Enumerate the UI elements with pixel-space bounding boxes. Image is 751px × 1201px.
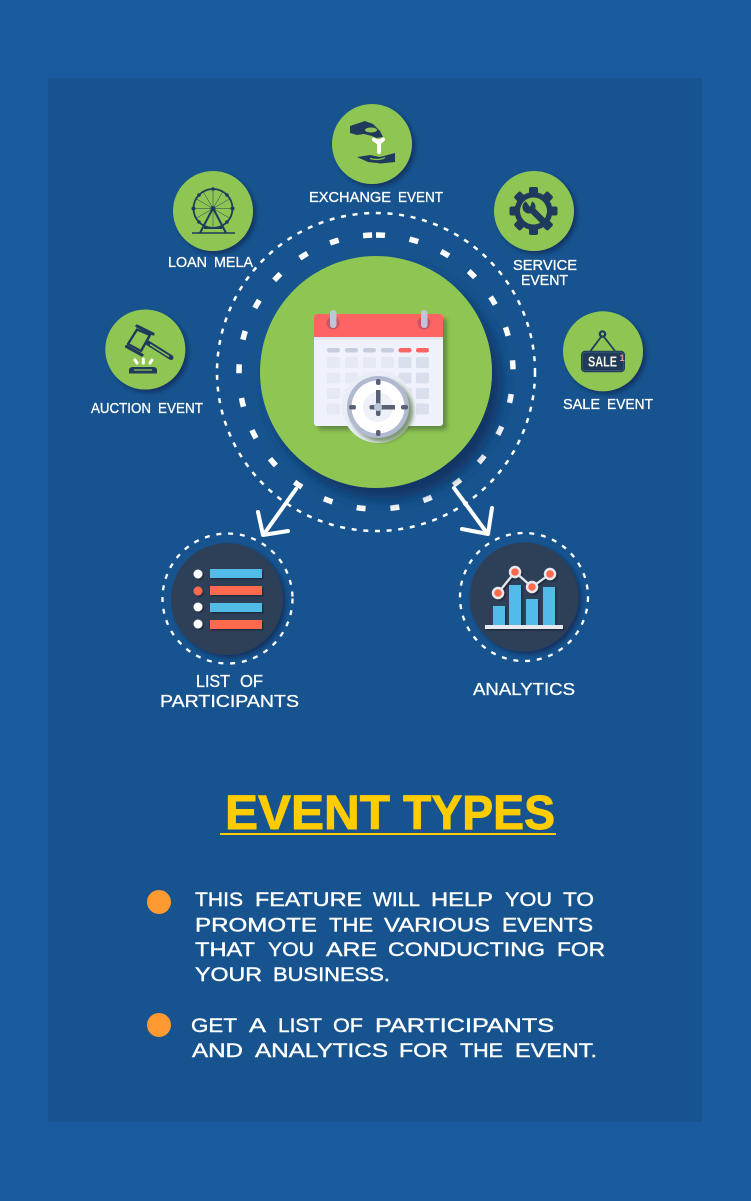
panel: main background (48, 78, 702, 1122)
label: exchange event: EVENT (398, 189, 443, 206)
bullet point 1: YOU (505, 889, 552, 911)
bullet point 2: AND (192, 1040, 243, 1062)
bullet point 1: EVENTS (502, 914, 593, 936)
bullet point 1: FEATURE (255, 889, 362, 911)
bullet point 2: ANALYTICS (255, 1040, 388, 1062)
label: auction event (91, 400, 203, 417)
icon: exchange hands (350, 121, 395, 164)
bullet point 1: YOUR (195, 964, 262, 986)
bullet point 1: WILL (373, 889, 420, 911)
dotted outer ring (217, 213, 535, 531)
label: exchange event: EXCHANGE (309, 189, 391, 206)
bullet point 1: THIS (195, 889, 243, 911)
bullet point 1: HELP (431, 889, 493, 911)
label: sale event (563, 396, 653, 413)
arrow: to analytics (454, 488, 492, 534)
icon: sale sign: SALE (588, 355, 617, 371)
bullet point 1: VARIOUS (384, 914, 490, 936)
bullet point 1: THE (329, 914, 373, 936)
label: service event: EVENT (521, 272, 568, 289)
icon: calendar with clock (314, 310, 443, 443)
bullet point 2: LIST (278, 1015, 322, 1037)
label: auction event: EVENT (158, 400, 203, 417)
bullet point 1: ARE (326, 939, 377, 961)
bullet point 1: PROMOTE (195, 914, 317, 936)
node: list of participants (160, 534, 299, 711)
icon: sale sign (581, 330, 625, 372)
heading: event types: TYPES (403, 787, 555, 840)
label: list of participants: OF (240, 671, 263, 691)
label: service event (513, 257, 577, 289)
icon: bar and line chart (485, 567, 563, 629)
bullet point 2: PARTICIPANTS (375, 1015, 554, 1037)
bullet point 2 (147, 1013, 597, 1062)
heading: event types: EVENT (225, 787, 390, 840)
bullet point 1: TO (563, 889, 594, 911)
label: loan mela: LOAN (168, 254, 207, 271)
bullet point 2: THE (460, 1040, 503, 1062)
heading: event types (220, 787, 556, 840)
label: analytics: ANALYTICS (473, 679, 575, 699)
label: sale event: EVENT (607, 396, 653, 413)
label: loan mela (168, 254, 253, 271)
icon: gavel (126, 326, 171, 374)
icon: ferris wheel (192, 187, 235, 233)
bullet point 2: OF (333, 1015, 363, 1037)
bullet point 1: YOU (268, 939, 314, 961)
icon: sale sign: 1 (620, 353, 625, 363)
bullet point 1: CONDUCTING (388, 939, 545, 961)
node: exchange event (309, 104, 443, 206)
node: loan mela (168, 171, 253, 271)
label: list of participants: PARTICIPANTS (160, 691, 299, 711)
label: auction event: AUCTION (91, 400, 151, 417)
bullet point 2: A (249, 1015, 266, 1037)
label: sale event: SALE (563, 396, 600, 413)
label: service event: SERVICE (513, 257, 577, 274)
central green circle (260, 256, 492, 488)
node: service event (494, 171, 577, 289)
label: loan mela: MELA (214, 254, 253, 271)
node: analytics (460, 533, 588, 699)
arrow: to participants (258, 489, 296, 535)
label: list of participants: LIST (196, 671, 230, 691)
icon: list (194, 569, 262, 629)
label: exchange event (309, 189, 443, 206)
bullet point 2: GET (191, 1015, 237, 1037)
node: auction event (91, 310, 203, 417)
bullet point 2: EVENT. (515, 1040, 597, 1062)
dashed inner ring (239, 235, 513, 509)
bullet point 1: THAT (195, 939, 255, 961)
label: list of participants (160, 671, 299, 711)
bullet point 1: FOR (557, 939, 605, 961)
bullet point 2: FOR (399, 1040, 448, 1062)
bullet point 1: BUSINESS. (273, 964, 390, 986)
icon: gear and wrench (510, 187, 558, 235)
node: sale event (563, 311, 653, 413)
bullet point 1 (147, 889, 605, 986)
